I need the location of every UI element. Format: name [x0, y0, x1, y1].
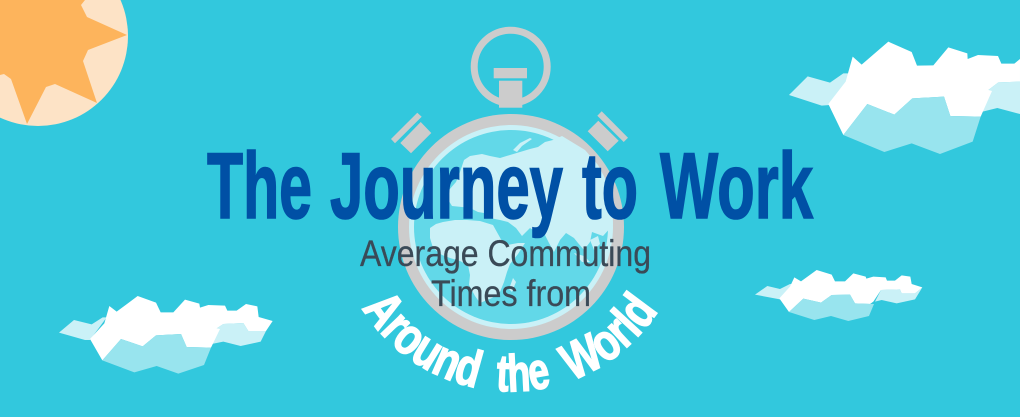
globe rim	[409, 125, 613, 329]
subtitle	[360, 233, 651, 314]
stopwatch left button	[391, 113, 431, 153]
icon: cloud small right	[755, 270, 922, 321]
icon: sun	[0, 0, 128, 126]
icon: cloud top right	[789, 42, 1020, 154]
stopwatch right button	[588, 111, 628, 151]
title: Journey	[330, 133, 563, 238]
icon: cloud bottom left	[59, 296, 273, 374]
icon: stopwatch with globe	[391, 30, 628, 340]
title: to	[582, 133, 638, 238]
subtitle: Average Commuting	[360, 233, 651, 274]
globe land masses	[430, 136, 613, 303]
title: Work	[660, 133, 813, 238]
stopwatch loop	[474, 30, 547, 103]
stopwatch case	[398, 114, 624, 340]
subtitle: Times from	[431, 273, 591, 314]
curved heading: Around the World	[361, 290, 658, 392]
globe ocean	[414, 130, 608, 324]
stopwatch crown	[494, 68, 527, 108]
title: The	[207, 133, 312, 238]
